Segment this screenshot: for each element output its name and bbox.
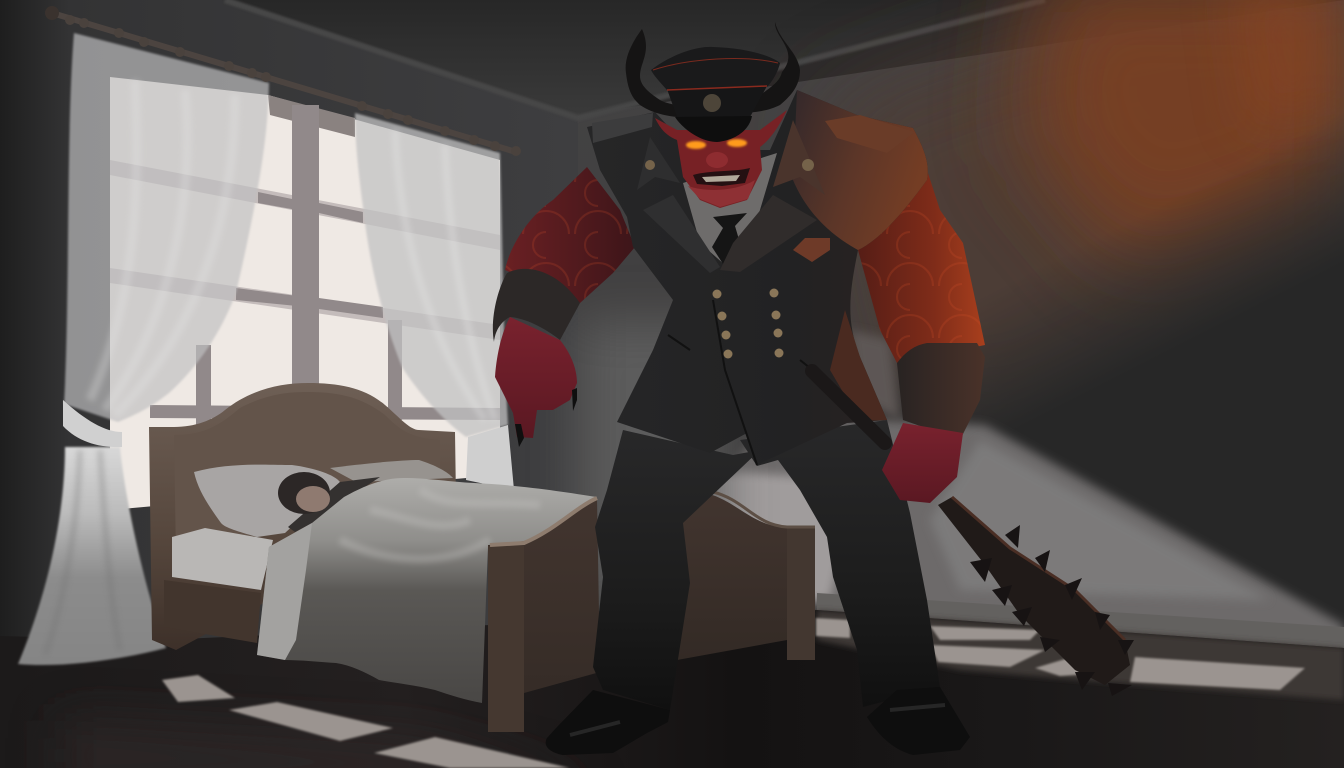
shoes	[546, 687, 970, 755]
pillows	[194, 465, 340, 537]
mattress	[172, 528, 273, 590]
lapels	[643, 195, 720, 273]
blanket flap	[257, 523, 312, 660]
curtain rod	[45, 6, 521, 156]
floor	[0, 610, 1344, 768]
hand	[495, 317, 577, 438]
light: orange glow on wall	[820, 0, 1344, 430]
bed	[149, 383, 815, 732]
buttons	[712, 288, 784, 358]
sleeper	[278, 472, 380, 532]
cuff	[897, 343, 985, 440]
curtain tie	[63, 400, 122, 447]
right hand	[882, 423, 963, 503]
trousers	[593, 420, 940, 710]
curtain: left	[18, 33, 269, 665]
headboard	[149, 383, 456, 650]
footboard	[488, 498, 600, 732]
blanket	[257, 478, 597, 703]
oni head	[655, 110, 787, 208]
left arm: tattooed	[493, 167, 635, 447]
bed frame side	[164, 580, 261, 643]
club	[812, 371, 1134, 696]
floor light patches	[162, 618, 1305, 768]
horns	[626, 22, 800, 118]
curtain lower drape	[18, 447, 166, 665]
oni figure	[493, 22, 1134, 755]
right arm: tattooed	[858, 170, 985, 440]
curtain tail	[466, 425, 514, 490]
chest insignia	[793, 238, 830, 262]
glowing eyes	[686, 139, 747, 149]
right shoulder lit	[793, 90, 928, 250]
epaulettes	[592, 113, 653, 143]
collar	[637, 137, 680, 190]
baseboard	[817, 593, 1344, 648]
collar pins	[645, 159, 814, 171]
curtain lower folds	[45, 450, 120, 655]
light: beam on wall	[578, 320, 1344, 640]
curtain: right	[355, 113, 514, 490]
dark band on wall	[820, 0, 1344, 660]
skirt lit edge	[830, 310, 887, 421]
shirt and tie	[683, 153, 777, 265]
jacket	[587, 90, 928, 465]
cuff	[493, 269, 580, 342]
officer cap	[651, 47, 780, 142]
window	[110, 77, 500, 510]
